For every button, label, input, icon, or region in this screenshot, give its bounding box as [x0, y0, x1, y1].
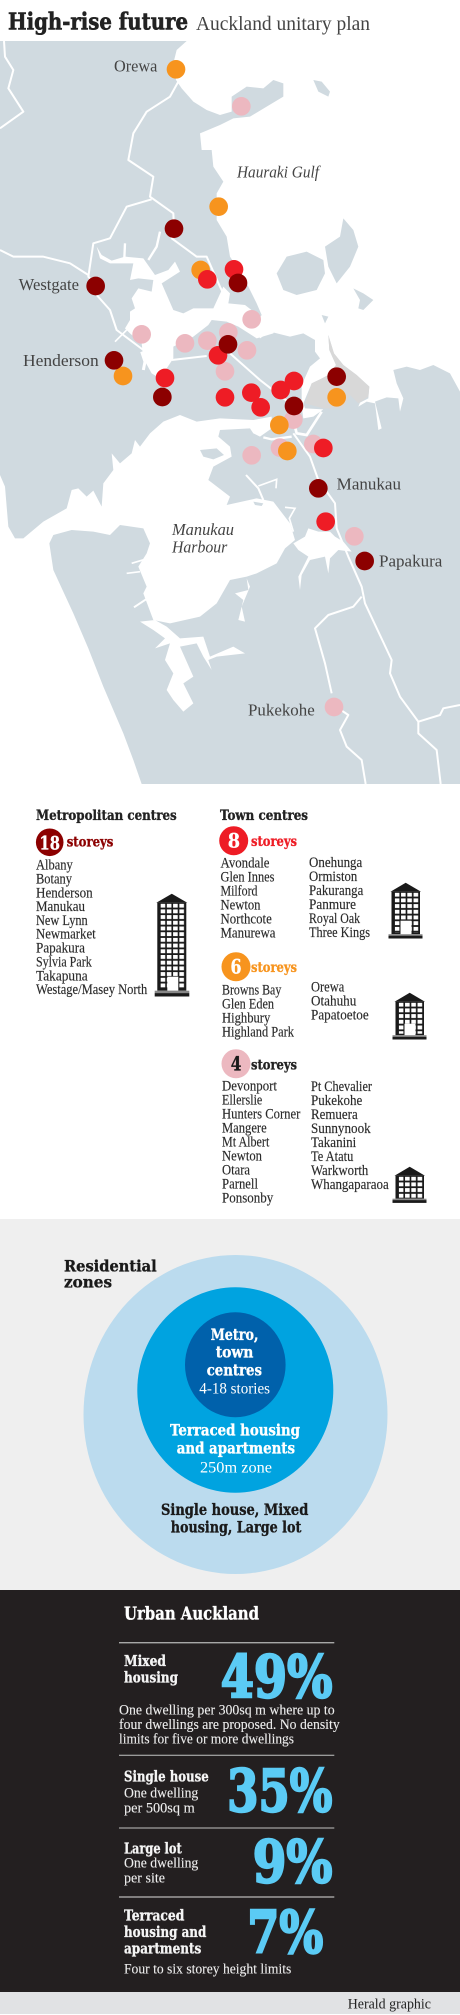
inner zone label: town — [216, 1343, 254, 1362]
panel: town centres: Town centres — [220, 808, 308, 824]
stat: mixed housing 49%: One dwelling per 300sq m where up to — [119, 1702, 335, 1718]
heading: Residential — [64, 1256, 157, 1275]
stat: terraced housing 7%: 7% — [247, 1899, 323, 1967]
8 storeys group: Manurewa — [220, 926, 276, 942]
stat: single house 35%: 35% — [227, 1757, 332, 1825]
title — [8, 8, 370, 36]
panel: Urban Auckland — [0, 1590, 460, 1992]
outer zone label: housing, Large lot — [171, 1518, 302, 1537]
4 storeys group: Mt Albert — [222, 1134, 269, 1150]
stat: terraced housing 7%: Terraced — [124, 1907, 185, 1925]
inner zone label: centres — [207, 1360, 262, 1379]
4 storeys group: 4 — [231, 1052, 241, 1076]
stat: single house 35%: Single house — [124, 1768, 209, 1786]
stat: terraced housing 7%: housing and — [124, 1923, 207, 1941]
4 storeys group: Ponsonby — [222, 1190, 274, 1206]
panel: metropolitan centres: Sylvia Park — [36, 954, 92, 970]
4 storeys group: Pukekohe — [311, 1093, 362, 1109]
8 storeys group: Glen Innes — [220, 870, 275, 886]
6 storeys group: 6 — [230, 954, 242, 978]
stat: terraced housing 7% — [124, 1899, 323, 1977]
stat: mixed housing 49% — [119, 1643, 340, 1748]
outer zone label: Single house, Mixed — [161, 1500, 308, 1519]
8 storeys group: Ormiston — [309, 869, 358, 885]
4 storeys group: Takanini — [311, 1135, 356, 1151]
map of Auckland: Papakura — [379, 552, 443, 571]
8 storeys group: 8 — [228, 828, 240, 852]
4 storeys group: Remuera — [311, 1107, 358, 1123]
4 storeys group: storeys — [251, 1057, 297, 1073]
map of Auckland: Manukau — [171, 520, 234, 539]
panel: metropolitan centres: Westage/Masey North — [36, 982, 148, 998]
panel: metropolitan centres: Henderson — [36, 885, 93, 901]
stat: large lot 9%: 9% — [253, 1828, 332, 1896]
8 storeys group: Three Kings — [309, 925, 370, 941]
middle zone label — [170, 1421, 300, 1477]
4 storeys group: Newton — [222, 1148, 263, 1164]
6 storeys group: Glen Eden — [222, 996, 275, 1012]
panel: metropolitan centres: Papakura — [36, 941, 86, 957]
6 storeys group: Highbury — [222, 1010, 271, 1026]
panel: metropolitan centres: Albany — [36, 857, 73, 873]
panel: metropolitan centres: Manukau — [36, 899, 85, 915]
stat: large lot 9%: Large lot — [124, 1839, 182, 1857]
stat: mixed housing 49%: four dwellings are proposed. No density — [119, 1717, 340, 1733]
map of Auckland: Henderson — [23, 351, 99, 370]
6 storeys group: Browns Bay — [222, 982, 282, 998]
8 storeys group: Royal Oak — [309, 911, 361, 927]
4 storeys group: Ellerslie — [222, 1092, 262, 1108]
panel heading: Urban Auckland — [124, 1604, 259, 1624]
map of Auckland: Manukau — [337, 475, 401, 494]
panel: metropolitan centres: Takapuna — [36, 968, 88, 984]
heading: zones — [64, 1273, 112, 1292]
4 storeys group: Otara — [222, 1162, 250, 1178]
map of Auckland: Harbour — [171, 537, 228, 556]
8 storeys group: Avondale — [220, 856, 270, 872]
8 storeys group — [219, 826, 422, 942]
panel: metropolitan centres: storeys — [67, 835, 113, 851]
icon: 18-storey tower — [155, 894, 189, 996]
map of Auckland: Hauraki Gulf — [236, 162, 321, 181]
6 storeys group: Otahuhu — [311, 994, 356, 1010]
middle zone label: 250m zone — [200, 1460, 272, 1477]
8 storeys group: Newton — [220, 898, 261, 914]
panel: metropolitan centres: Metropolitan centres — [36, 808, 177, 824]
footer credit — [0, 1992, 460, 2014]
panel: metropolitan centres: Newmarket — [36, 927, 96, 943]
4 storeys group: Mangere — [222, 1120, 267, 1136]
4 storeys group: Sunnynook — [311, 1121, 371, 1137]
6 storeys group: Orewa — [311, 980, 345, 996]
8 storeys group: Milford — [220, 884, 258, 900]
heading — [64, 1256, 157, 1292]
6 storeys group: Papatoetoe — [311, 1008, 369, 1024]
4 storeys group: Whangaparaoa — [311, 1177, 389, 1193]
middle zone label: Terraced housing — [170, 1421, 300, 1440]
stat: large lot 9%: One dwelling — [124, 1856, 198, 1872]
8 storeys group: Pakuranga — [309, 883, 364, 899]
stat: single house 35% — [124, 1757, 332, 1825]
6 storeys group: storeys — [251, 960, 297, 976]
stat: terraced housing 7%: Four to six storey height limits — [124, 1961, 292, 1977]
8 storeys group: Onehunga — [309, 855, 363, 871]
4 storeys group: Parnell — [222, 1176, 258, 1192]
4 storeys group: Te Atatu — [311, 1149, 353, 1165]
panel: metropolitan centres: New Lynn — [36, 913, 88, 929]
middle zone label: and apartments — [177, 1438, 295, 1457]
map of Auckland: Orewa — [114, 57, 158, 76]
inner zone label — [199, 1325, 270, 1397]
4 storeys group: Hunters Corner — [222, 1106, 300, 1122]
panel: metropolitan centres: 18 — [40, 833, 60, 854]
stat: mixed housing 49%: housing — [124, 1668, 178, 1686]
stat: large lot 9%: per site — [124, 1870, 165, 1886]
map of Auckland: Pukekohe — [248, 701, 315, 720]
stat: single house 35%: per 500sq m — [124, 1800, 195, 1816]
inner zone label: Metro, — [211, 1325, 258, 1344]
map of Auckland: Westgate — [19, 275, 79, 294]
stat: mixed housing 49%: limits for five or more dwellings — [119, 1732, 294, 1748]
4 storeys group — [222, 1049, 426, 1206]
stat: single house 35%: One dwelling — [124, 1786, 198, 1802]
stat: large lot 9% — [124, 1828, 332, 1896]
icon: 4-storey building — [392, 1167, 426, 1203]
6 storeys group: Highland Park — [222, 1024, 295, 1040]
title: Auckland unitary plan — [196, 14, 370, 35]
6 storeys group — [222, 952, 426, 1040]
zone circles diagram — [84, 1255, 388, 1574]
8 storeys group: Panmure — [309, 897, 356, 913]
4 storeys group: Devonport — [222, 1078, 277, 1094]
icon: 6-storey building — [392, 993, 426, 1040]
stat: terraced housing 7%: apartments — [124, 1939, 201, 1957]
stat: mixed housing 49%: 49% — [221, 1643, 332, 1711]
footer credit: Herald graphic — [348, 1996, 431, 2012]
map of Auckland — [0, 41, 460, 784]
title: High-rise future — [8, 8, 188, 36]
panel: metropolitan centres: Botany — [36, 871, 73, 887]
icon: 8-storey building — [388, 883, 422, 938]
panel: residential zones — [0, 1219, 460, 1590]
outer zone label — [161, 1500, 308, 1537]
8 storeys group: Northcote — [220, 912, 272, 928]
8 storeys group: storeys — [251, 834, 297, 850]
4 storeys group: Pt Chevalier — [311, 1079, 372, 1095]
panel: metropolitan centres — [36, 808, 189, 998]
4 storeys group: Warkworth — [311, 1163, 369, 1179]
stat: mixed housing 49%: Mixed — [124, 1652, 166, 1670]
panel: town centres — [219, 808, 426, 1206]
inner zone label: 4-18 stories — [199, 1380, 270, 1397]
